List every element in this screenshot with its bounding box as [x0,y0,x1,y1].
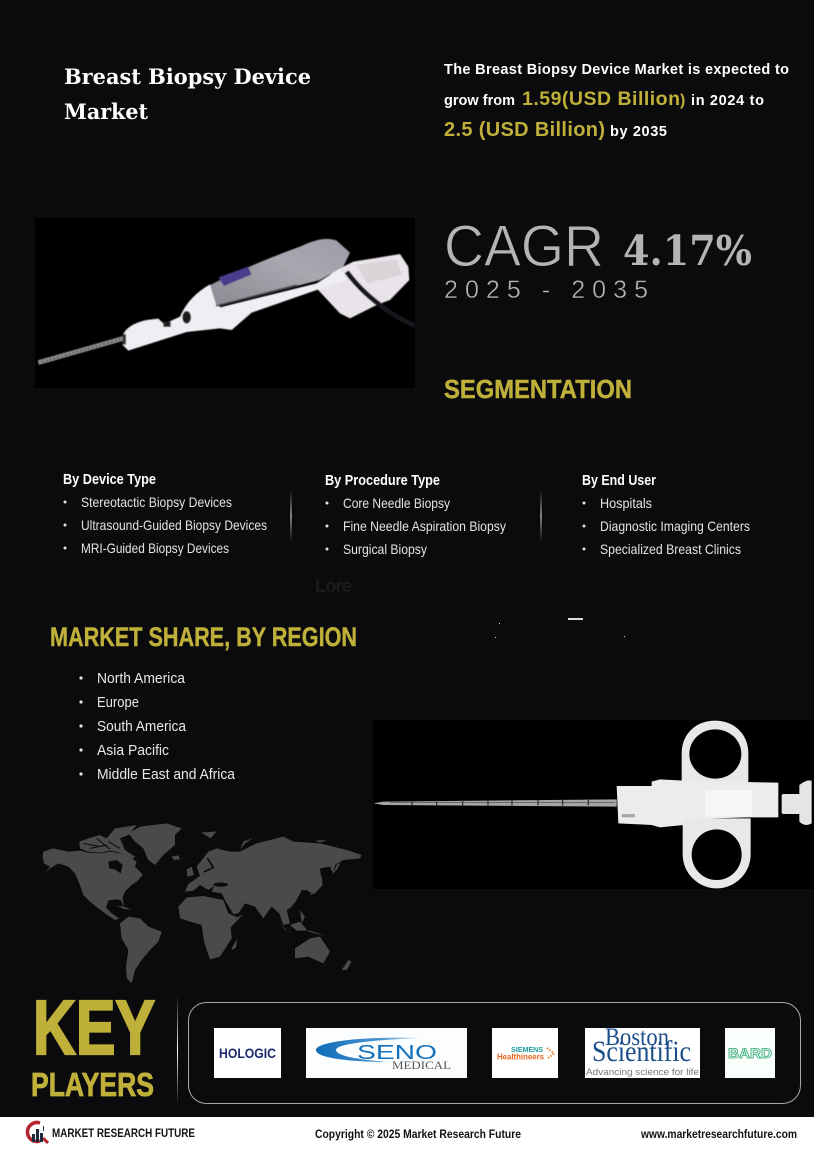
region list: Asia Pacific [97,742,169,759]
logo: Hologic: HOLOGIC [219,1045,276,1061]
logo: Boston Scientific [585,1024,700,1078]
segment column: device type: Stereotactic Biopsy Devices [81,494,232,510]
segment column: end user: Hospitals [600,495,652,511]
logo: Bard: BARD [728,1045,772,1061]
image: vacuum biopsy device [35,218,425,388]
footer bar: Copyright © 2025 Market Research Future [315,1127,521,1141]
region list: North America [97,670,186,687]
market forecast text: 1.59(USD Billion [522,88,680,110]
heading: key players: PLAYERS [31,1066,154,1103]
segment column: procedure type [325,472,506,557]
logo: Siemens Healthineers: SIEMENS [511,1045,543,1054]
market forecast text: The Breast Biopsy Device Market is expected to [444,62,789,78]
segment column: end user: By End User [582,472,656,489]
segment column: procedure type: Surgical Biopsy [343,541,427,557]
heading: segmentation: SEGMENTATION [444,374,632,404]
CAGR figure [444,214,752,304]
logo: Hologic [214,1028,281,1078]
market forecast text: by 2035 [610,124,667,140]
image: biopsy needle [373,720,814,889]
region list: Europe [97,694,139,711]
footer bar: MARKET RESEARCH FUTURE [52,1126,195,1140]
heading: market share by region: MARKET SHARE, BY REGION [50,622,357,652]
CAGR figure: 2025 - 2035 [444,276,648,304]
market forecast text: in 2024 to [691,93,764,109]
segment column: end user [582,472,750,557]
logo: Seno Medical: MEDICAL [392,1060,451,1072]
market forecast text: grow from [444,93,515,109]
CAGR figure: CAGR [444,214,604,279]
footer logo [27,1122,48,1143]
segment column: procedure type: Fine Needle Aspiration Biopsy [343,518,506,534]
panel: key player logos [188,1002,800,1104]
segment column: device type: MRI-Guided Biopsy Devices [81,540,229,556]
world map [43,823,362,983]
segment column: procedure type: By Procedure Type [325,472,440,489]
market forecast text: ) [680,92,685,109]
logo: Siemens Healthineers: Healthineers [497,1052,545,1062]
logo: Boston Scientific: Scientific [592,1035,691,1068]
faint stray text: Lore [315,576,352,596]
logo: Seno Medical: SENO [357,1042,437,1064]
market forecast text [444,62,789,141]
segment column: device type: Ultrasound-Guided Biopsy Devices [81,517,267,533]
segment column: device type [63,471,267,556]
title: Breast Biopsy Device [64,64,311,89]
logo: Boston Scientific: Advancing science for life [586,1067,699,1078]
segment column: end user: Diagnostic Imaging Centers [600,518,750,534]
heading: key players [31,985,155,1103]
market forecast text: 2.5 (USD Billion) [444,119,605,141]
logo: Boston Scientific: Boston [605,1024,669,1051]
segment column: procedure type: Core Needle Biopsy [343,495,450,511]
CAGR figure: 4.17% [623,227,752,275]
footer bar [0,1117,814,1150]
segment column: device type: By Device Type [63,471,156,488]
title [64,64,311,124]
logo: Bard [725,1028,775,1078]
region list [79,670,236,783]
title: Market [64,99,148,124]
logo: Seno Medical [306,1028,467,1078]
segment column: end user: Specialized Breast Clinics [600,541,741,557]
logo: Siemens Healthineers [492,1028,558,1078]
heading: key players: KEY [33,985,155,1071]
region list: South America [97,718,187,735]
region list: Middle East and Africa [97,766,236,783]
